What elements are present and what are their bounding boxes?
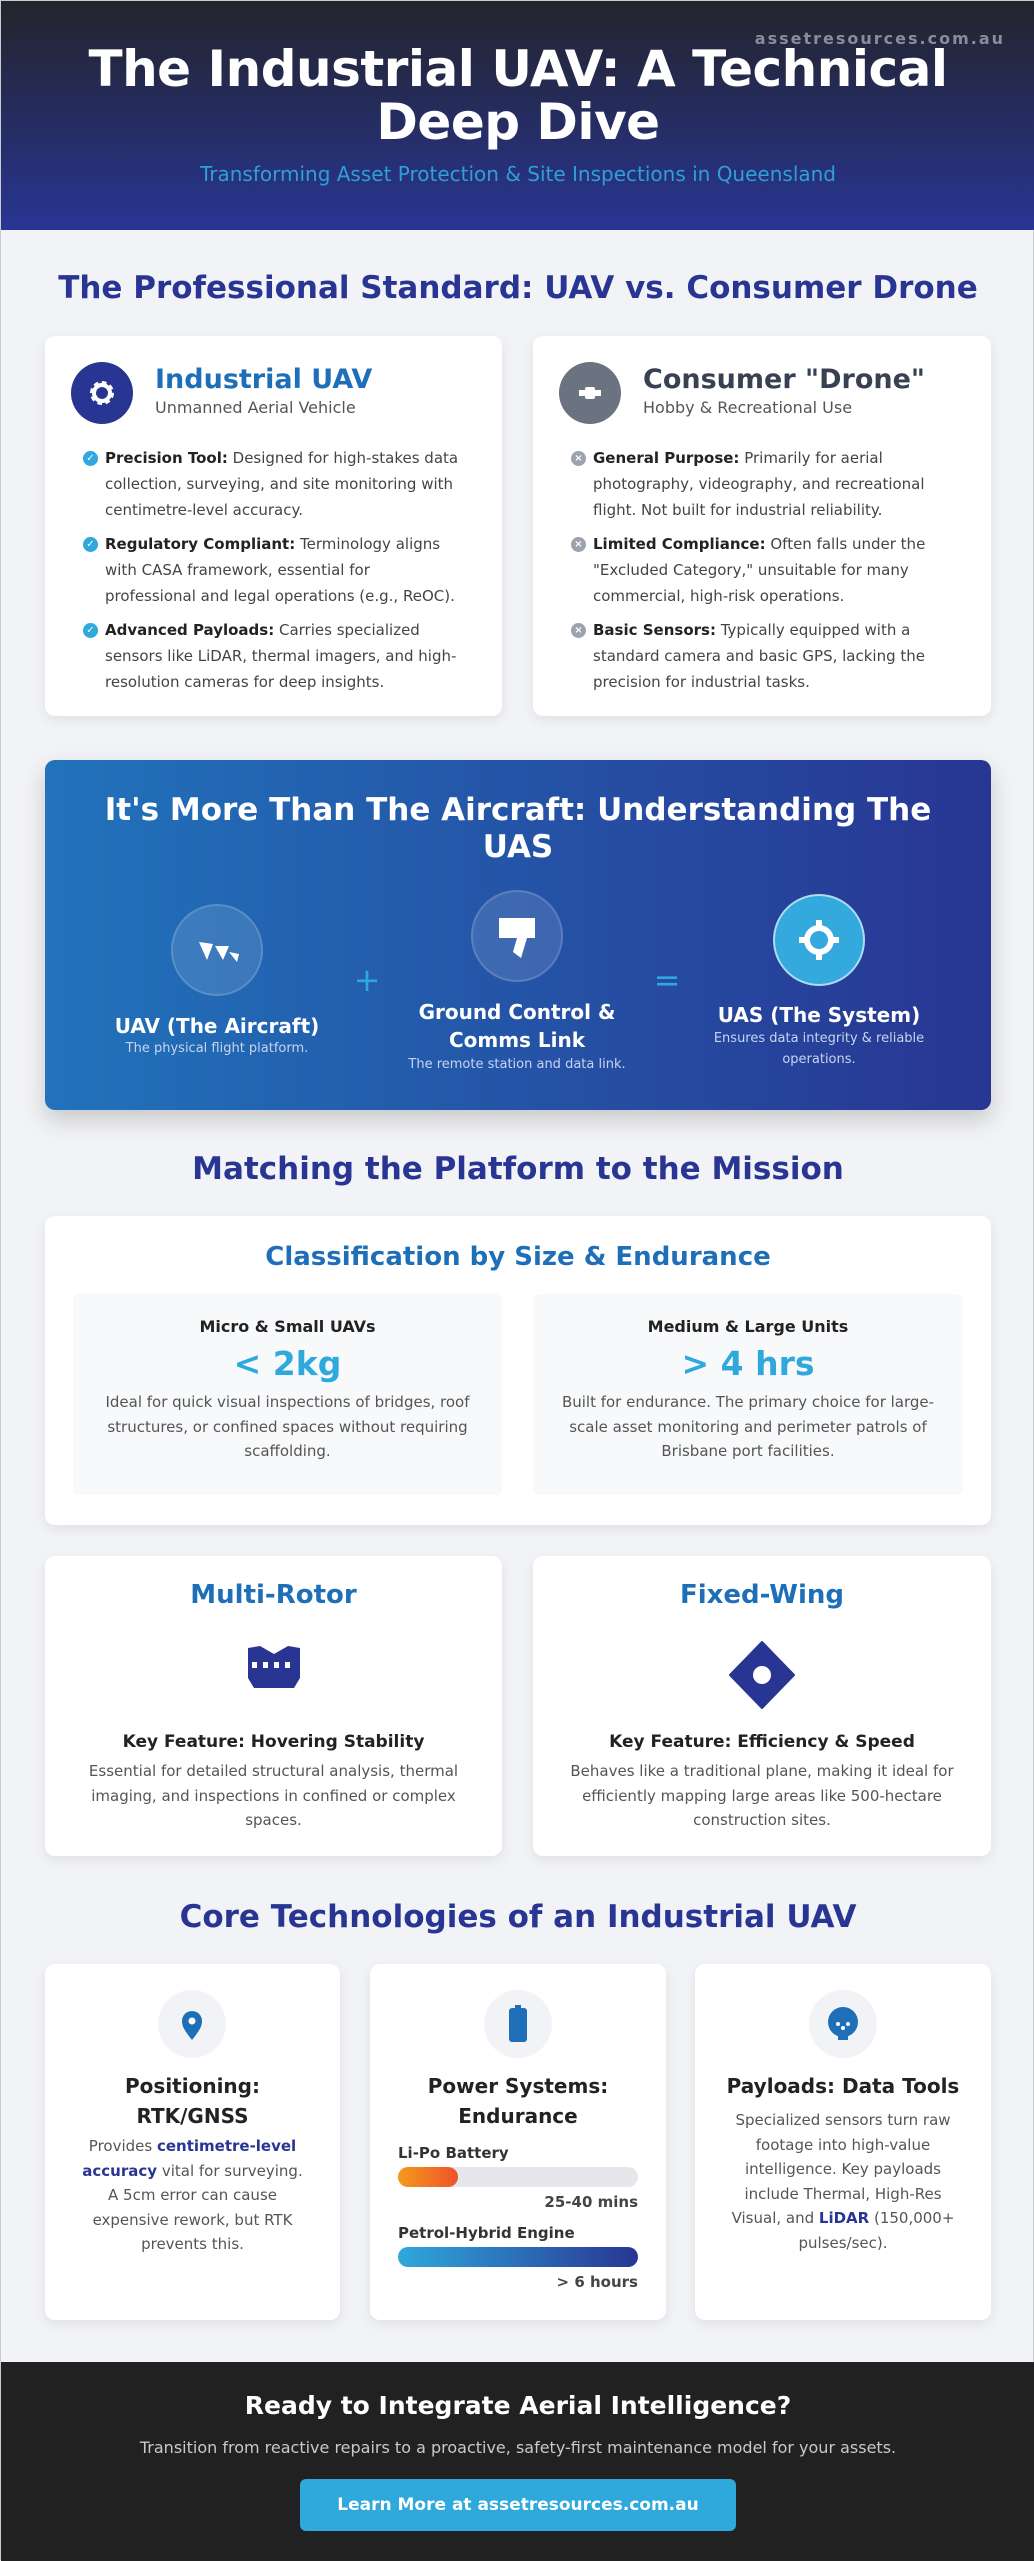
panel: industrial UAV: ✓ xyxy=(86,625,95,636)
button xyxy=(300,2479,736,2531)
panel: consumer drone: × xyxy=(574,625,583,636)
title xyxy=(125,2074,260,2128)
footer text: Transition from reactive repairs to a proactive, safety-first maintenance model for your assets. xyxy=(140,2438,896,2457)
title xyxy=(88,40,948,151)
bar: hybrid: > 6 hours xyxy=(557,2273,638,2291)
plus: + xyxy=(354,961,380,999)
watermark: assetresources.com.au xyxy=(755,29,1005,48)
description: Essential for detailed structural analysis, thermal imaging, and inspections in confined or complex spaces. xyxy=(89,1762,458,1829)
subtitle: Transforming Asset Protection & Site Inspections in Queensland xyxy=(200,162,836,186)
icon: pin xyxy=(158,1990,226,2058)
panel: UAS system xyxy=(45,760,991,1110)
text: Provides centimetre-level accuracy vital for surveying. A 5cm error can cause expensive rework, but RTK prevents this. xyxy=(82,2137,303,2253)
title: Multi-Rotor xyxy=(190,1580,357,1610)
icon: drone xyxy=(559,362,621,424)
header xyxy=(1,1,1034,230)
icon: system xyxy=(773,894,865,986)
box: medium: Medium & Large Units xyxy=(648,1317,848,1336)
title: Deep Dive xyxy=(376,93,660,151)
icon: fixed-wing xyxy=(729,1641,795,1709)
title: Endurance xyxy=(458,2104,578,2128)
box: micro xyxy=(73,1294,502,1495)
box: medium: Built for endurance. The primary choice for large-scale asset monitoring and perimeter patrols of Brisbane port facilities. xyxy=(562,1393,934,1460)
label: UAS: Ensures data integrity & reliable operations. xyxy=(714,1031,924,1067)
bullet: sensors: Basic Sensors: Typically equipped with a standard camera and basic GPS, lacking the precision for industrial tasks. xyxy=(593,621,925,691)
title: Positioning: xyxy=(125,2074,260,2098)
button: Learn More at assetresources.com.au xyxy=(337,2495,699,2515)
classification title: Classification by Size & Endurance xyxy=(265,1242,771,1272)
key feature: Key Feature: Hovering Stability xyxy=(123,1732,424,1752)
label: ground control: The remote station and data link. xyxy=(408,1057,626,1072)
title: Fixed-Wing xyxy=(680,1580,844,1610)
footer xyxy=(1,2362,1034,2561)
card subtitle: Unmanned Aerial Vehicle xyxy=(155,398,356,417)
bar: li-po: 25-40 mins xyxy=(544,2193,638,2211)
label: ground control: Ground Control & xyxy=(419,1000,615,1024)
icon: ground control xyxy=(471,890,563,982)
title: Payloads: Data Tools xyxy=(727,2074,959,2098)
panel: positioning xyxy=(45,1964,340,2320)
box: medium: > 4 hrs xyxy=(682,1344,814,1383)
bar: hybrid: Petrol-Hybrid Engine xyxy=(398,2224,575,2242)
bullet: limited: Limited Compliance: Often falls under the "Excluded Category," unsuitable for many commercial, high-risk operations. xyxy=(593,535,925,605)
panel: power xyxy=(370,1964,666,2320)
title: Power Systems: xyxy=(428,2074,608,2098)
heading: core tech: Core Technologies of an Industrial UAV xyxy=(180,1899,856,1935)
title: The Industrial UAV: A Technical xyxy=(88,40,948,98)
panel: fixed-wing xyxy=(533,1556,991,1856)
bar: hybrid xyxy=(398,2224,638,2291)
bar: li-po: Li-Po Battery xyxy=(398,2144,509,2162)
UAS title: It's More Than The Aircraft: Understanding The UAS xyxy=(105,792,931,865)
panel: industrial UAV: ✓ xyxy=(86,453,95,464)
heading: UAV vs consumer: The Professional Standard: UAV vs. Consumer Drone xyxy=(58,270,978,306)
bullet: precision: Precision Tool: Designed for high-stakes data collection, surveying, and site monitoring with centimetre-level accuracy. xyxy=(105,449,458,519)
bullet: general: General Purpose: Primarily for aerial photography, videography, and recreational flight. Not built for industrial reliability. xyxy=(593,449,925,519)
panel: industrial UAV xyxy=(45,336,502,716)
panel: consumer drone: × xyxy=(574,539,583,550)
panel: industrial UAV: ✓ xyxy=(86,539,95,550)
icon: gear xyxy=(71,362,133,424)
label: ground control xyxy=(408,1000,626,1072)
equals: = xyxy=(654,961,680,999)
title: RTK/GNSS xyxy=(136,2104,248,2128)
label: UAV: The physical flight platform. xyxy=(126,1041,308,1056)
text: Specialized sensors turn raw footage into high-value intelligence. Key payloads include Thermal, High-Res Visual, and LiDAR (150,000+ pulses/sec). xyxy=(732,2111,954,2252)
box: micro: Micro & Small UAVs xyxy=(199,1317,376,1336)
bar: li-po xyxy=(398,2144,638,2211)
description: Behaves like a traditional plane, making it ideal for efficiently mapping large areas like 500-hectare construction sites. xyxy=(570,1762,954,1829)
bullet: payloads: Advanced Payloads: Carries specialized sensors like LiDAR, thermal imagers, and high-resolution cameras for deep insights. xyxy=(105,621,456,691)
key feature: Key Feature: Efficiency & Speed xyxy=(609,1732,915,1752)
card title: Consumer "Drone" xyxy=(643,364,925,395)
panel: multi-rotor xyxy=(45,1556,502,1856)
card subtitle: Hobby & Recreational Use xyxy=(643,398,852,417)
panel: classification xyxy=(45,1216,991,1525)
card title: Industrial UAV xyxy=(155,364,372,395)
icon: multi-rotor xyxy=(248,1646,300,1688)
icon: battery xyxy=(484,1990,552,2058)
label: UAS xyxy=(714,1003,924,1067)
label: UAV xyxy=(115,1014,319,1056)
footer title: Ready to Integrate Aerial Intelligence? xyxy=(245,2391,791,2420)
label: UAV: UAV (The Aircraft) xyxy=(115,1014,319,1038)
label: UAS: UAS (The System) xyxy=(718,1003,920,1027)
icon: sensor xyxy=(809,1990,877,2058)
box: micro: < 2kg xyxy=(234,1344,341,1383)
bullet: regulatory: Regulatory Compliant: Terminology aligns with CASA framework, essential for professional and legal operations (e.g., ReOC). xyxy=(105,535,455,605)
heading: mission: Matching the Platform to the Mission xyxy=(192,1151,844,1187)
icon: aircraft xyxy=(171,904,263,996)
label: ground control: Comms Link xyxy=(449,1028,585,1052)
panel: consumer drone xyxy=(533,336,991,716)
title xyxy=(428,2074,608,2128)
panel: payloads xyxy=(695,1964,991,2320)
box: micro: Ideal for quick visual inspections of bridges, roof structures, or confined spaces without requiring scaffolding. xyxy=(105,1393,470,1460)
panel: consumer drone: × xyxy=(574,453,583,464)
box: medium xyxy=(533,1294,963,1495)
